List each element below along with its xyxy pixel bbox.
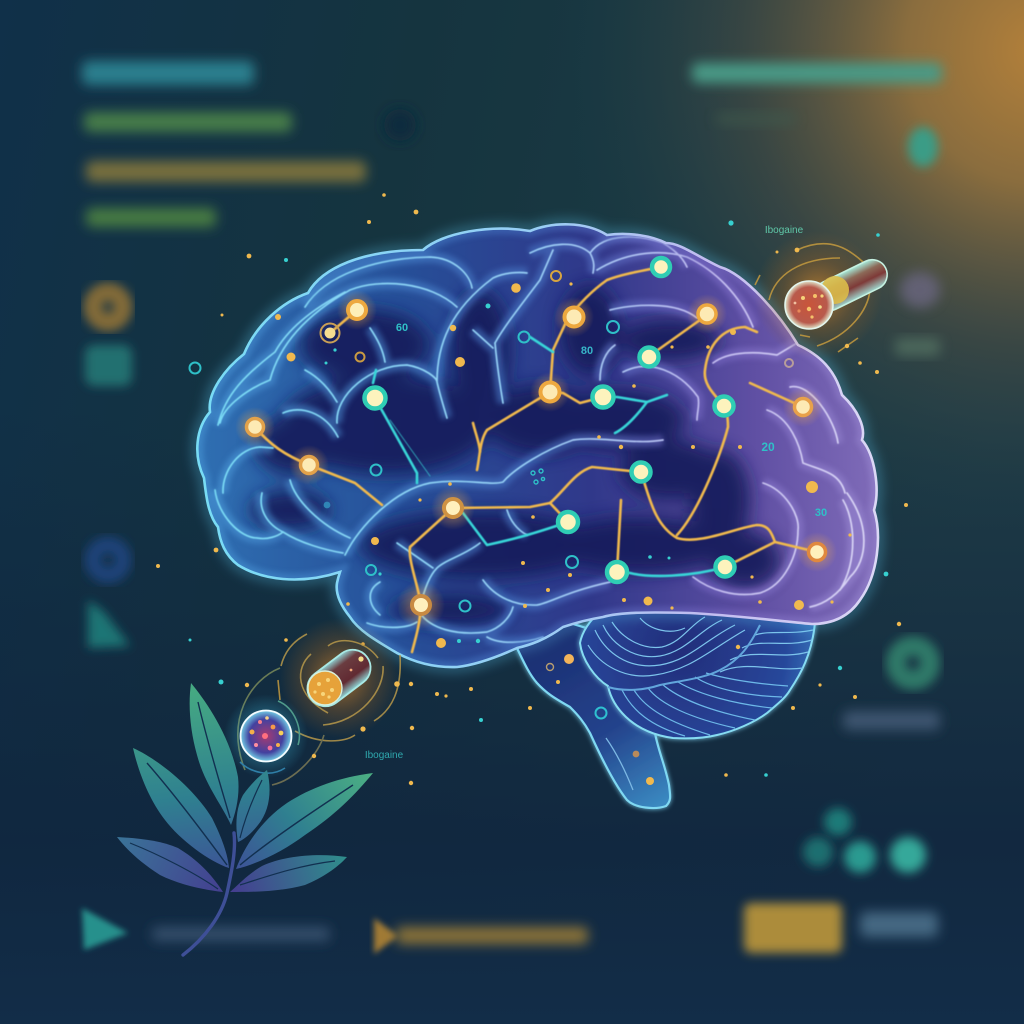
- blurred icons: lower right: [803, 646, 940, 873]
- small hollow rings: [190, 271, 793, 718]
- dark inner shading of the lobes: [250, 285, 780, 626]
- plant leaves: [117, 683, 373, 955]
- upper left leaf: [133, 748, 229, 868]
- capsule and orb lower left with orbit rings: [224, 618, 400, 785]
- lower left leaf: [117, 837, 223, 892]
- blurred panel: top-left heading and text: [82, 61, 416, 227]
- lower lobe folds: [622, 673, 788, 736]
- inline number labels inside brain: 60: [396, 322, 408, 334]
- inline number labels inside brain: 20: [761, 440, 775, 454]
- teal nodes: [364, 258, 734, 582]
- blurred footer row: [82, 903, 938, 954]
- capsule top right with orbit rings: [754, 231, 892, 359]
- capsule inner sphere: [785, 276, 849, 329]
- long right leaf: [236, 773, 373, 869]
- particles: teal: [188, 220, 888, 777]
- capsule granules: [308, 656, 364, 705]
- brain body: [197, 224, 878, 667]
- Ibogaine label top right: Ibogaine: [765, 225, 804, 236]
- neural pathways: cyan lines: [373, 337, 725, 576]
- neural pathways: gold lines: [255, 267, 817, 652]
- glowing orb: [224, 694, 308, 778]
- brainstem: [517, 620, 690, 808]
- small molecule glyph: [531, 469, 545, 484]
- lower capsule body: [300, 643, 378, 713]
- capsule body: [809, 255, 892, 316]
- blurred panel: top-right heading and icons: [692, 63, 942, 356]
- lower right leaf: [230, 855, 347, 892]
- top leaf: [190, 683, 239, 825]
- inline number labels inside brain: [396, 322, 827, 519]
- inline number labels inside brain: 30: [815, 507, 827, 519]
- particles: gold: [156, 193, 908, 785]
- blurred icons: left column: [85, 292, 132, 648]
- cerebellum: [580, 610, 815, 738]
- small inner leaf: [236, 770, 270, 842]
- Ibogaine label lower: Ibogaine: [365, 750, 404, 761]
- gold nodes: [235, 290, 837, 629]
- inline number labels inside brain: 80: [581, 345, 593, 357]
- gyri outlines: [215, 237, 864, 642]
- upper lobe folds: [588, 617, 813, 690]
